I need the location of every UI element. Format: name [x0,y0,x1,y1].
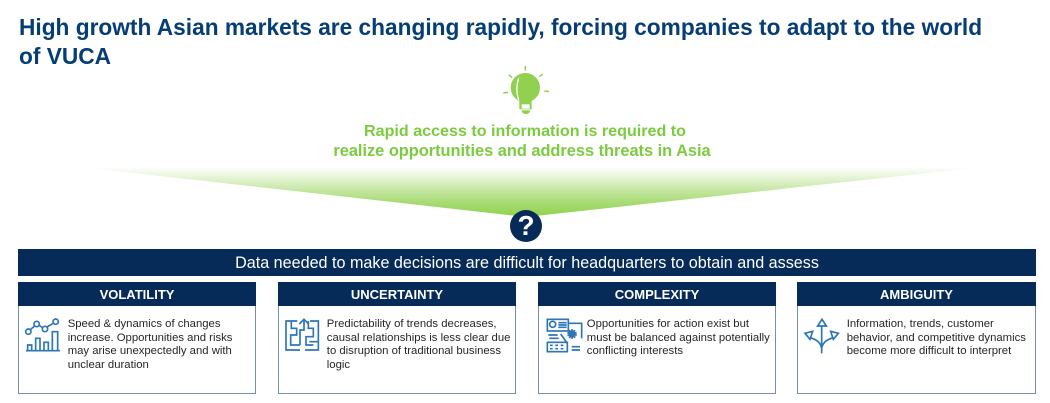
title [19,14,982,69]
heading: complexity: COMPLEXITY [615,287,699,302]
panel: uncertainty [278,282,516,394]
callout: green message [333,122,711,160]
panel: ambiguity [797,282,1036,394]
funnel gradient [102,169,960,216]
text: ambiguity: Information, trends, customer [847,318,994,330]
title: High growth Asian markets are changing rapidly, forcing companies to adapt to the world [19,14,982,40]
text: uncertainty: causal relationships is less clear due [327,332,510,344]
text: complexity [587,318,770,357]
text: volatility [68,318,232,371]
text: complexity: must be balanced against potentially [587,332,770,344]
callout: green message: realize opportunities and address threats in Asia [333,142,711,160]
heading: volatility [18,282,256,306]
text: ambiguity [847,318,1026,357]
heading: uncertainty [278,282,516,306]
heading: uncertainty: UNCERTAINTY [351,287,443,302]
text: complexity: conflicting interests [587,345,683,357]
text: uncertainty: logic [327,359,350,371]
text: complexity: Opportunities for action exist but [587,318,749,330]
text: uncertainty: Predictability of trends decreases, [327,318,497,330]
heading: volatility: VOLATILITY [100,287,174,302]
text: volatility: Speed & dynamics of changes [68,318,221,330]
icon: line and bar chart [24,318,60,352]
text: uncertainty: to disruption of traditional business [327,345,501,357]
icon: three-way arrows [804,318,840,354]
banner: Data needed to make decisions are difficult for headquarters to obtain and assess [235,254,819,272]
panel: complexity [538,282,776,394]
banner [18,249,1036,276]
icon: light bulb [503,66,550,114]
heading: ambiguity [797,282,1036,306]
callout: green message: Rapid access to information is required to [364,122,686,140]
text: ambiguity: become more difficult to interpret [847,345,1011,357]
panel: volatility [18,282,256,394]
title: of VUCA [19,43,111,69]
text: volatility: increase. Opportunities and risks [68,332,232,344]
text: uncertainty [326,318,510,371]
icon: question mark [510,210,542,242]
icon: maze [285,318,320,351]
icon: dashboard and gears [546,318,582,352]
heading: complexity [538,282,776,306]
text: volatility: may arise unexpectedly and with [68,345,232,357]
text: volatility: unclear duration [68,359,149,371]
heading: ambiguity: AMBIGUITY [880,287,953,302]
icon: question mark: ? [517,210,535,241]
text: ambiguity: behavior, and competitive dynamics [847,332,1026,344]
